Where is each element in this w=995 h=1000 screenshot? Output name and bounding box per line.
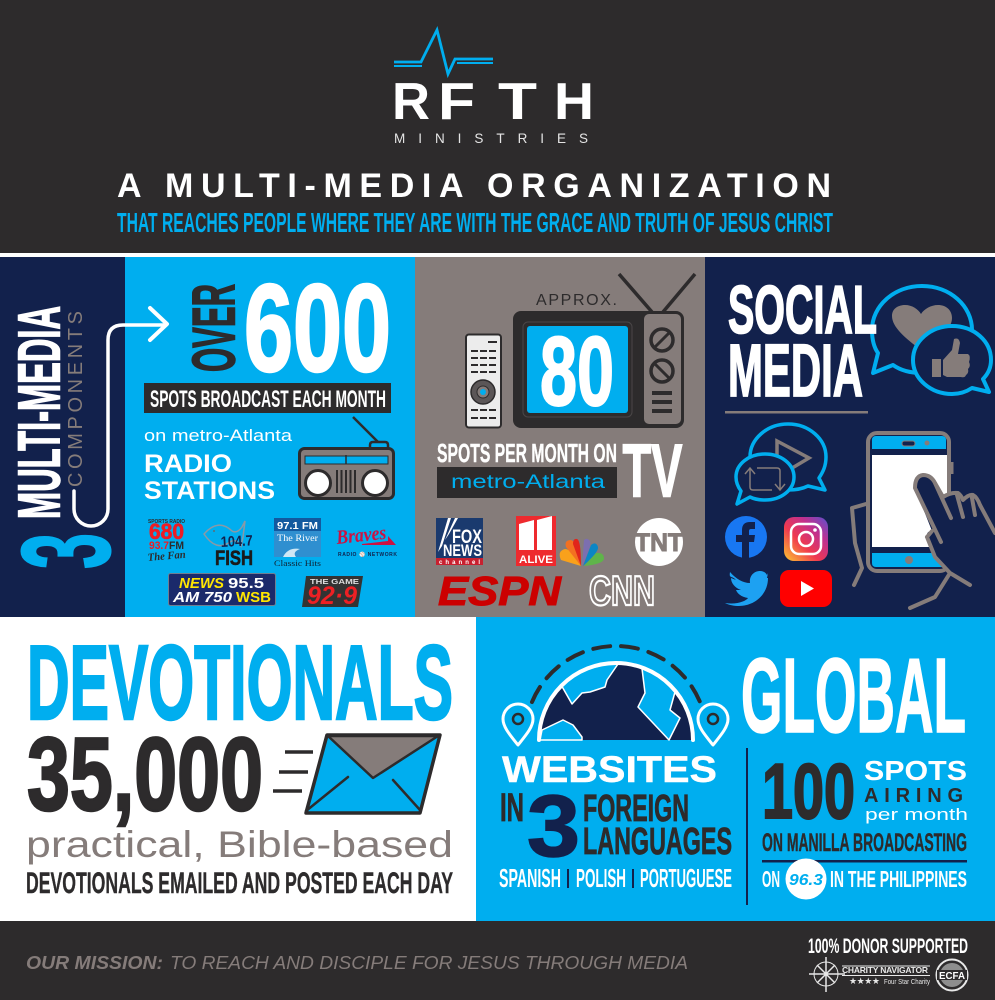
logo: 680 the fan: SPORTS RADIO bbox=[148, 519, 185, 525]
white divider band bbox=[0, 253, 995, 257]
tv text: metro-Atlanta bbox=[451, 472, 606, 493]
icon: globe with pins bbox=[503, 646, 728, 745]
logo: 97.1 the river: 97.1 FM bbox=[277, 520, 318, 532]
charity navigator text bbox=[842, 965, 930, 986]
logo: tnt: TNT bbox=[635, 529, 683, 557]
icon: speech bubble with thumb bbox=[913, 326, 991, 394]
logo wordmark: MINISTRIES bbox=[394, 131, 588, 146]
logo: news 95.5 wsb: AM 750 bbox=[172, 589, 233, 606]
charity navigator text: CHARITY NAVIGATOR bbox=[842, 965, 928, 975]
radio text bbox=[144, 427, 293, 505]
philippines block bbox=[762, 747, 968, 900]
logo: 11 alive bbox=[516, 516, 556, 566]
icon: speed lines bbox=[273, 752, 313, 791]
mission statement: OUR MISSION: bbox=[26, 953, 163, 973]
icon: instagram bbox=[784, 517, 828, 561]
languages list: PORTUGUESE bbox=[640, 863, 732, 893]
panel: header bbox=[0, 0, 995, 253]
logo wordmark: R bbox=[392, 73, 430, 131]
text: devotionals emailed: DEVOTIONALS EMAILED AND POSTED EACH DAY bbox=[26, 867, 453, 900]
radio text: on metro-Atlanta bbox=[144, 427, 293, 445]
mission statement: TO REACH AND DISCIPLE FOR JESUS THROUGH MEDIA bbox=[170, 953, 688, 973]
logo: fox news: channel bbox=[439, 560, 480, 566]
icon: RFTH pulse logo bbox=[394, 30, 493, 74]
panel: social media bbox=[705, 257, 995, 617]
icon: facebook bbox=[725, 516, 767, 558]
numeral 3: 3 bbox=[0, 533, 136, 569]
logo: fox news: NEWS bbox=[443, 541, 482, 560]
logo: braves radio network bbox=[334, 522, 397, 558]
icon: envelope bbox=[306, 735, 440, 813]
logo: 680 the fan: The Fan bbox=[147, 549, 186, 564]
icon: twitter bbox=[725, 571, 768, 606]
websites block: IN bbox=[500, 786, 524, 830]
panel: 3 multi-media components bbox=[0, 257, 136, 617]
logo: 104.7 the fish: FISH bbox=[215, 547, 253, 570]
logo: the game 92.9 bbox=[302, 576, 363, 610]
philippines block: 100 bbox=[762, 747, 855, 835]
logo: 680 the fan bbox=[147, 519, 186, 564]
logo: 97.1 the river: Classic Hits bbox=[274, 558, 321, 568]
logo: news 95.5 wsb: 95.5 bbox=[228, 575, 264, 592]
logo: the game 92.9: 92·9 bbox=[307, 582, 357, 610]
radio text: RADIO bbox=[144, 450, 232, 478]
logo: nbc peacock bbox=[560, 539, 604, 566]
hand bbox=[852, 475, 995, 608]
logo: braves radio network: RADIO ⚾ NETWORK bbox=[338, 551, 397, 558]
social media heading: SOCIAL bbox=[728, 272, 877, 348]
logo: news 95.5 wsb: WSB bbox=[236, 589, 271, 606]
logo: espn: ESPN bbox=[438, 568, 563, 614]
social media heading bbox=[728, 272, 877, 412]
number 600: 600 bbox=[244, 260, 391, 398]
logo: news 95.5 wsb bbox=[168, 574, 276, 606]
tv text: TV bbox=[622, 428, 682, 512]
over label: OVER bbox=[180, 284, 248, 372]
logo: braves radio network: Braves bbox=[334, 522, 387, 549]
philippines block: per month bbox=[865, 805, 968, 824]
icon: radio bbox=[300, 417, 394, 498]
icon: ecfa seal bbox=[936, 960, 968, 990]
icon: speech bubble with heart bbox=[872, 286, 972, 373]
logo: 680 the fan: 93.7 bbox=[149, 540, 169, 552]
panel: footer bbox=[0, 921, 995, 1000]
social media heading: MEDIA bbox=[728, 329, 863, 412]
logo wordmark: T bbox=[498, 73, 537, 131]
logo wordmark: H bbox=[554, 73, 594, 131]
logo: cnn: CNN bbox=[589, 567, 655, 614]
icon: speech bubble with retweet bbox=[736, 454, 794, 504]
panel: television bbox=[415, 257, 705, 617]
languages list: POLISH bbox=[576, 863, 626, 893]
websites block: 3 bbox=[527, 778, 580, 875]
logo: fox news: FOX bbox=[452, 527, 482, 548]
icon: remote bbox=[466, 334, 501, 428]
websites block: WEBSITES bbox=[502, 749, 717, 790]
logo: 104.7 the fish: 104.7 bbox=[220, 532, 253, 551]
phone bbox=[868, 433, 952, 571]
logo wordmark bbox=[392, 73, 594, 146]
logo: fox news bbox=[436, 518, 483, 566]
panel: radio bbox=[125, 257, 415, 617]
heading: components: COMPONENTS bbox=[65, 311, 87, 487]
charity navigator text: ★★★★ bbox=[849, 976, 880, 986]
logo: 104.7 the fish bbox=[204, 521, 253, 570]
approx label: APPROX. bbox=[536, 292, 617, 309]
heading: multi-media: MULTI-MEDIA bbox=[6, 306, 72, 519]
logo: news 95.5 wsb: NEWS bbox=[179, 575, 224, 592]
logo: the game 92.9: THE GAME bbox=[310, 577, 359, 586]
tv text: SPOTS PER MONTH ON bbox=[437, 440, 617, 468]
icon: tv set bbox=[513, 274, 695, 428]
panel: devotionals bbox=[0, 617, 476, 921]
logo: tnt bbox=[635, 518, 683, 566]
icon: ecfa seal: ECFA bbox=[939, 971, 965, 982]
philippines block: AIRING bbox=[864, 785, 963, 807]
languages list: SPANISH bbox=[499, 863, 561, 893]
number 80: 80 bbox=[540, 316, 614, 426]
icon: charity navigator compass bbox=[809, 957, 845, 992]
languages list bbox=[499, 863, 732, 893]
websites block: LANGUAGES bbox=[583, 821, 732, 863]
logo: 680 the fan: FM bbox=[169, 540, 184, 552]
logo wordmark: F bbox=[438, 73, 475, 131]
divider rule bbox=[725, 411, 868, 414]
philippines block: 96.3 bbox=[789, 872, 823, 889]
text: practical bible-based: practical, Bible-based bbox=[26, 824, 453, 865]
websites block: FOREIGN bbox=[583, 788, 689, 830]
icon: phone and hand bbox=[852, 433, 995, 608]
icon: youtube bbox=[780, 570, 832, 607]
websites block bbox=[500, 749, 732, 875]
logo: 680 the fan: 680 bbox=[149, 519, 184, 544]
logo: 97.1 the river: The River bbox=[277, 533, 318, 543]
panel: global bbox=[476, 617, 995, 921]
spots banner bbox=[144, 383, 391, 413]
philippines block: SPOTS bbox=[864, 755, 967, 786]
tv text bbox=[437, 428, 682, 512]
philippines block: ON bbox=[762, 866, 780, 892]
charity navigator text: Four Star Charity bbox=[884, 977, 930, 986]
icon: speech bubble with play bbox=[750, 424, 826, 490]
logo: 97.1 the river bbox=[274, 518, 321, 568]
radio text: STATIONS bbox=[144, 477, 275, 505]
arrow: components to radio bbox=[74, 308, 167, 526]
heading: devotionals: DEVOTIONALS bbox=[27, 624, 453, 742]
spots banner: SPOTS BROADCAST EACH MONTH bbox=[150, 386, 386, 413]
title: A MULTI-MEDIA ORGANIZATION bbox=[117, 167, 831, 205]
logo: 11 alive: ALIVE bbox=[519, 554, 553, 566]
vertical divider bbox=[746, 748, 748, 905]
number 35,000: 35,000 bbox=[27, 717, 263, 833]
